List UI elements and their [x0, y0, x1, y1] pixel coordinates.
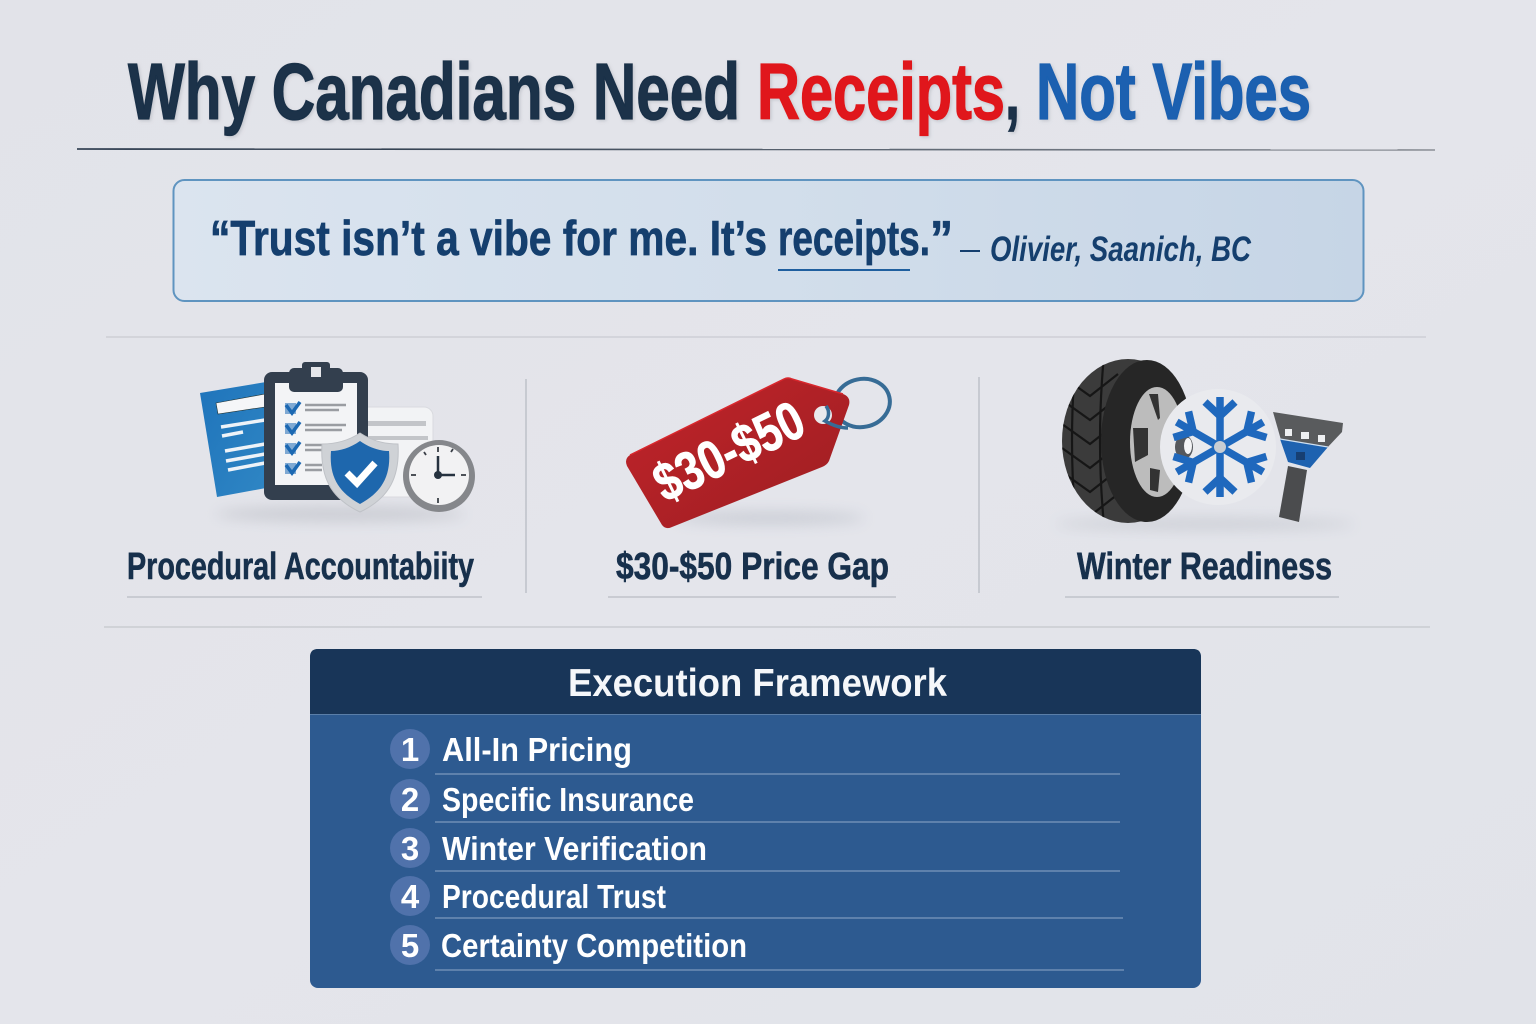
- title: ,: [1005, 47, 1020, 136]
- quote text: “Trust isn’t a vibe for me. It’s: [210, 212, 767, 266]
- tire: [1062, 359, 1186, 523]
- tag price: $30-$50: [644, 390, 814, 514]
- title: Not Vibes: [1036, 47, 1311, 136]
- title: Receipts: [757, 47, 1005, 136]
- step 4: 4: [401, 878, 420, 915]
- label: procedural accountability: Procedural Accountabiity: [127, 546, 474, 588]
- step 5: Certainty Competition: [441, 927, 747, 964]
- quote box: Olivier, Saanich, BC: [990, 230, 1252, 269]
- panel: execution framework: [310, 649, 1201, 988]
- quote text: ”: [930, 212, 953, 266]
- step 1: All-In Pricing: [442, 731, 632, 768]
- tag body: [626, 378, 849, 528]
- step 3: Winter Verification: [442, 830, 707, 867]
- step 5: 5: [401, 927, 419, 964]
- step 2: Specific Insurance: [442, 781, 694, 818]
- quote box: [174, 180, 1364, 301]
- ice scraper: [1273, 412, 1343, 522]
- icon: blue document: [200, 382, 266, 497]
- tag ring: [830, 374, 894, 432]
- icon: price tag: [626, 374, 894, 528]
- panel heading: Execution Framework: [568, 662, 947, 705]
- step 2: 2: [401, 781, 419, 818]
- panel header: [310, 649, 1201, 714]
- card behind clipboard: [360, 407, 433, 497]
- clock: [403, 440, 475, 512]
- quote text: receipts.: [778, 212, 930, 266]
- snowflake disk: [1160, 389, 1276, 505]
- shield with check: [322, 433, 398, 512]
- step 5: [390, 925, 1124, 970]
- step 3: [390, 828, 1120, 871]
- clipboard: [264, 362, 368, 500]
- title: [128, 47, 1311, 136]
- step 1: 1: [401, 731, 419, 768]
- icon: winter tire, snowflake and scraper: [1055, 350, 1355, 529]
- step 4: Procedural Trust: [442, 878, 666, 915]
- step 1: [390, 729, 1120, 774]
- step 2: [390, 779, 1120, 822]
- icon: clipboard, shield and clock: [200, 362, 475, 521]
- step 4: [390, 876, 1123, 918]
- tag hole: [814, 406, 832, 424]
- step 3: 3: [401, 830, 419, 867]
- label: price gap: $30-$50 Price Gap: [616, 546, 889, 588]
- title: Why Canadians Need: [128, 47, 740, 136]
- label: winter readiness: Winter Readiness: [1077, 546, 1332, 588]
